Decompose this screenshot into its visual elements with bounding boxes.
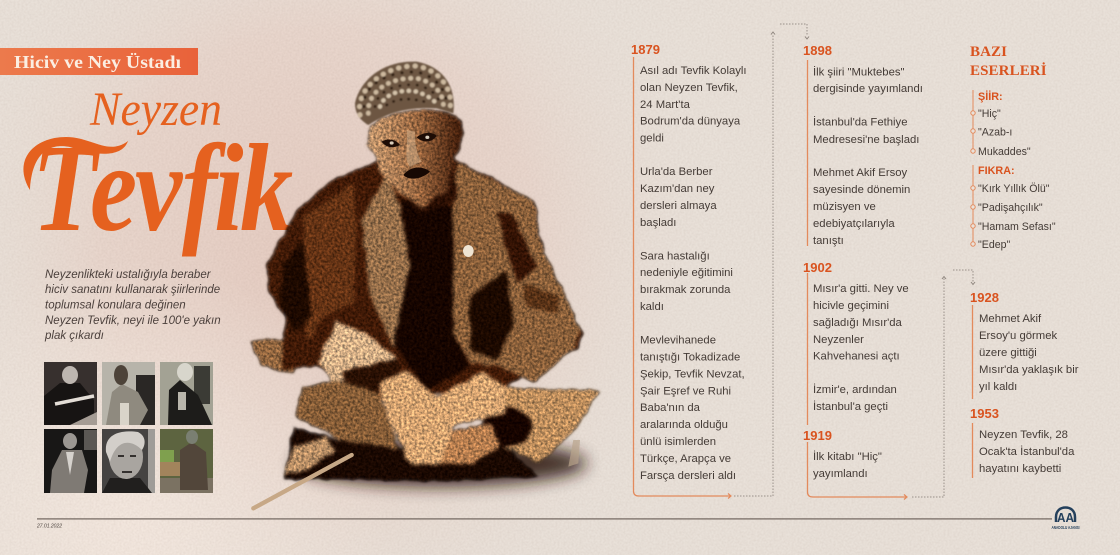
text: 24 Mart'ta — [640, 99, 691, 111]
text: dersleri almaya — [640, 200, 717, 212]
footer rule — [37, 518, 1052, 520]
poetry list: Mukaddes" — [978, 146, 1031, 158]
text: Mevlevihanede — [640, 334, 716, 346]
curly hair — [355, 62, 454, 125]
heading: ESERLERİ — [970, 62, 1047, 79]
hands — [378, 370, 507, 465]
photo grid — [44, 362, 213, 493]
text 1928: Mehmet Akif — [979, 313, 1042, 325]
text 1902: Mısır'a gitti. Ney ve — [813, 283, 909, 295]
text 1928: Mısır'da yaklaşık bir — [979, 364, 1079, 376]
shoe — [283, 437, 335, 475]
left trouser leg — [295, 380, 400, 453]
photo 3: seated in coat — [160, 362, 213, 425]
photo 6: bronze statue — [160, 429, 213, 493]
face — [368, 109, 463, 208]
jacket shadow — [470, 270, 513, 360]
text: Farsça dersleri aldı — [640, 470, 736, 482]
dark shirt — [393, 200, 470, 390]
anecdote list: "Padişahçılık" — [978, 202, 1043, 214]
text: başladı — [640, 217, 676, 229]
poetry list: "Azab-ı — [978, 126, 1012, 138]
text: Baba'nın da — [640, 402, 701, 414]
text: aralarında olduğu — [640, 419, 728, 431]
text 1902: hicivle geçimini — [813, 300, 889, 312]
text 1898: sayesinde dönemin — [813, 184, 910, 196]
log at right — [493, 387, 602, 463]
text 1902 — [813, 283, 909, 413]
text: nedeniyle eğitimini — [640, 267, 733, 279]
heading: BAZI — [970, 44, 1007, 60]
Anadolu Ajansi logo: ANADOLU AJANSI — [1052, 525, 1080, 530]
left coat highlight — [303, 183, 357, 343]
photo 4: older portrait — [44, 429, 97, 493]
timeline lines — [972, 305, 974, 478]
intro paragraph: hiciv sanatını kullanarak şiirlerinde — [45, 284, 220, 296]
intro paragraph: toplumsal konulara değinen — [45, 300, 186, 312]
jacket silhouette — [267, 160, 583, 400]
text: kaldı — [640, 301, 664, 313]
text 1902: Neyzenler — [813, 334, 864, 346]
year: 1879 — [631, 42, 660, 57]
neck — [397, 160, 457, 213]
right jacket — [452, 162, 580, 383]
left coat dark fold — [280, 240, 312, 333]
timeline line and arrow — [634, 24, 809, 498]
text: Şair Eşref ve Ruhi — [640, 386, 731, 398]
Anadolu Ajansi logo — [1052, 508, 1080, 530]
text 1919: yayımlandı — [813, 468, 868, 480]
text 1928 — [979, 313, 1079, 393]
date: 27.01.2022 — [36, 524, 62, 530]
text 1953: Ocak'ta İstanbul'da — [979, 445, 1075, 458]
1928-1953 timeline column — [970, 290, 1079, 478]
year 1902: 1902 — [803, 260, 832, 275]
photo 5: close-up portrait — [102, 429, 155, 493]
text 1898: Medresesi'ne başladı — [813, 134, 919, 146]
selected works panel — [970, 44, 1056, 251]
text: Asıl adı Tevfik Kolaylı — [640, 65, 747, 77]
timeline line and arrow — [808, 60, 975, 500]
text 1953: Neyzen Tevfik, 28 — [979, 429, 1068, 441]
text 1898 — [813, 66, 923, 247]
text 1928: Ersoy'u görmek — [979, 330, 1057, 342]
text 1898: İlk şiiri "Muktebes" — [813, 66, 905, 78]
text — [640, 65, 747, 482]
1879 timeline column — [631, 24, 809, 498]
text 1898: tanıştı — [813, 235, 844, 247]
poetry list: "Hiç" — [978, 108, 1001, 120]
text 1898: Mehmet Akif Ersoy — [813, 167, 908, 179]
text 1919 — [813, 450, 882, 480]
text 1919: İlk kitabı "Hiç" — [813, 450, 882, 463]
Anadolu Ajansi logo: AA — [1057, 510, 1075, 525]
intro paragraph: plak çıkardı — [44, 330, 104, 342]
year 1898: 1898 — [803, 43, 832, 58]
text: geldi — [640, 132, 664, 144]
text: Kazım'dan ney — [640, 183, 715, 195]
figure — [250, 109, 602, 482]
text: Şekip, Tevfik Nevzat, — [640, 368, 745, 380]
dark under hand — [482, 407, 532, 447]
text 1898: dergisinde yayımlandı — [813, 83, 923, 95]
text: tanıştığı Tokadizade — [640, 352, 740, 364]
photo 1: playing the ney — [44, 362, 97, 425]
anecdote list: "Edep" — [978, 239, 1011, 251]
anecdote list: "Hamam Sefası" — [978, 221, 1056, 233]
anecdote list — [978, 165, 1056, 251]
year 1919: 1919 — [803, 428, 832, 443]
anecdote list: FIKRA: — [978, 165, 1015, 177]
text 1902: İstanbul'a geçti — [813, 400, 888, 413]
year 1928: 1928 — [970, 290, 999, 305]
cuff — [342, 358, 403, 395]
intro paragraph — [44, 269, 221, 342]
text: ünlü isimlerden — [640, 436, 716, 448]
text 1902: İzmir'e, ardından — [813, 383, 897, 396]
text 1928: yıl kaldı — [979, 381, 1017, 393]
text 1902: Kahvehanesi açtı — [813, 350, 900, 362]
title: Neyzen Tevfik: Tevfik — [32, 120, 293, 258]
text 1928: üzere gittiği — [979, 347, 1037, 359]
text: Sara hastalığı — [640, 250, 710, 262]
ground shadow — [293, 440, 587, 487]
log at left — [250, 338, 303, 375]
text: bırakmak zorunda — [640, 284, 731, 296]
poetry list — [978, 90, 1031, 158]
text 1953: hayatını kaybetti — [979, 463, 1061, 475]
text: Urla'da Berber — [640, 166, 713, 178]
facial features — [253, 130, 580, 508]
left lapel — [362, 172, 422, 347]
heading — [970, 44, 1047, 79]
photo 2: seated with ney — [102, 362, 155, 425]
text 1898: müzisyen ve — [813, 201, 876, 213]
text: Bodrum'da dünyaya — [640, 116, 741, 128]
main portrait photograph — [250, 62, 602, 508]
anecdote list: "Kırk Yıllık Ölü" — [978, 183, 1050, 195]
subtitle banner: Hiciv ve Ney Üstadı — [14, 52, 181, 72]
intro paragraph: Neyzenlikteki ustalığıyla beraber — [45, 269, 212, 281]
text: Türkçe, Arapça ve — [640, 453, 731, 465]
text: olan Neyzen Tevfik, — [640, 82, 738, 94]
year 1953: 1953 — [970, 406, 999, 421]
intro paragraph: Neyzen Tevfik, neyi ile 100'e yakın — [45, 315, 221, 327]
lower shadow — [283, 427, 540, 482]
poetry list: ŞİİR: — [978, 90, 1003, 103]
connector lines and dots — [971, 90, 975, 246]
left sleeve — [318, 322, 398, 385]
text 1898: edebiyatçılarıyla — [813, 218, 895, 230]
1898-1919 timeline column — [803, 43, 975, 500]
text 1953 — [979, 429, 1075, 475]
text 1902: sağladığı Mısır'da — [813, 317, 903, 329]
text 1898: İstanbul'da Fethiye — [813, 116, 907, 128]
title: Neyzen Tevfik: Neyzen — [89, 83, 222, 136]
subtitle banner — [0, 48, 198, 75]
